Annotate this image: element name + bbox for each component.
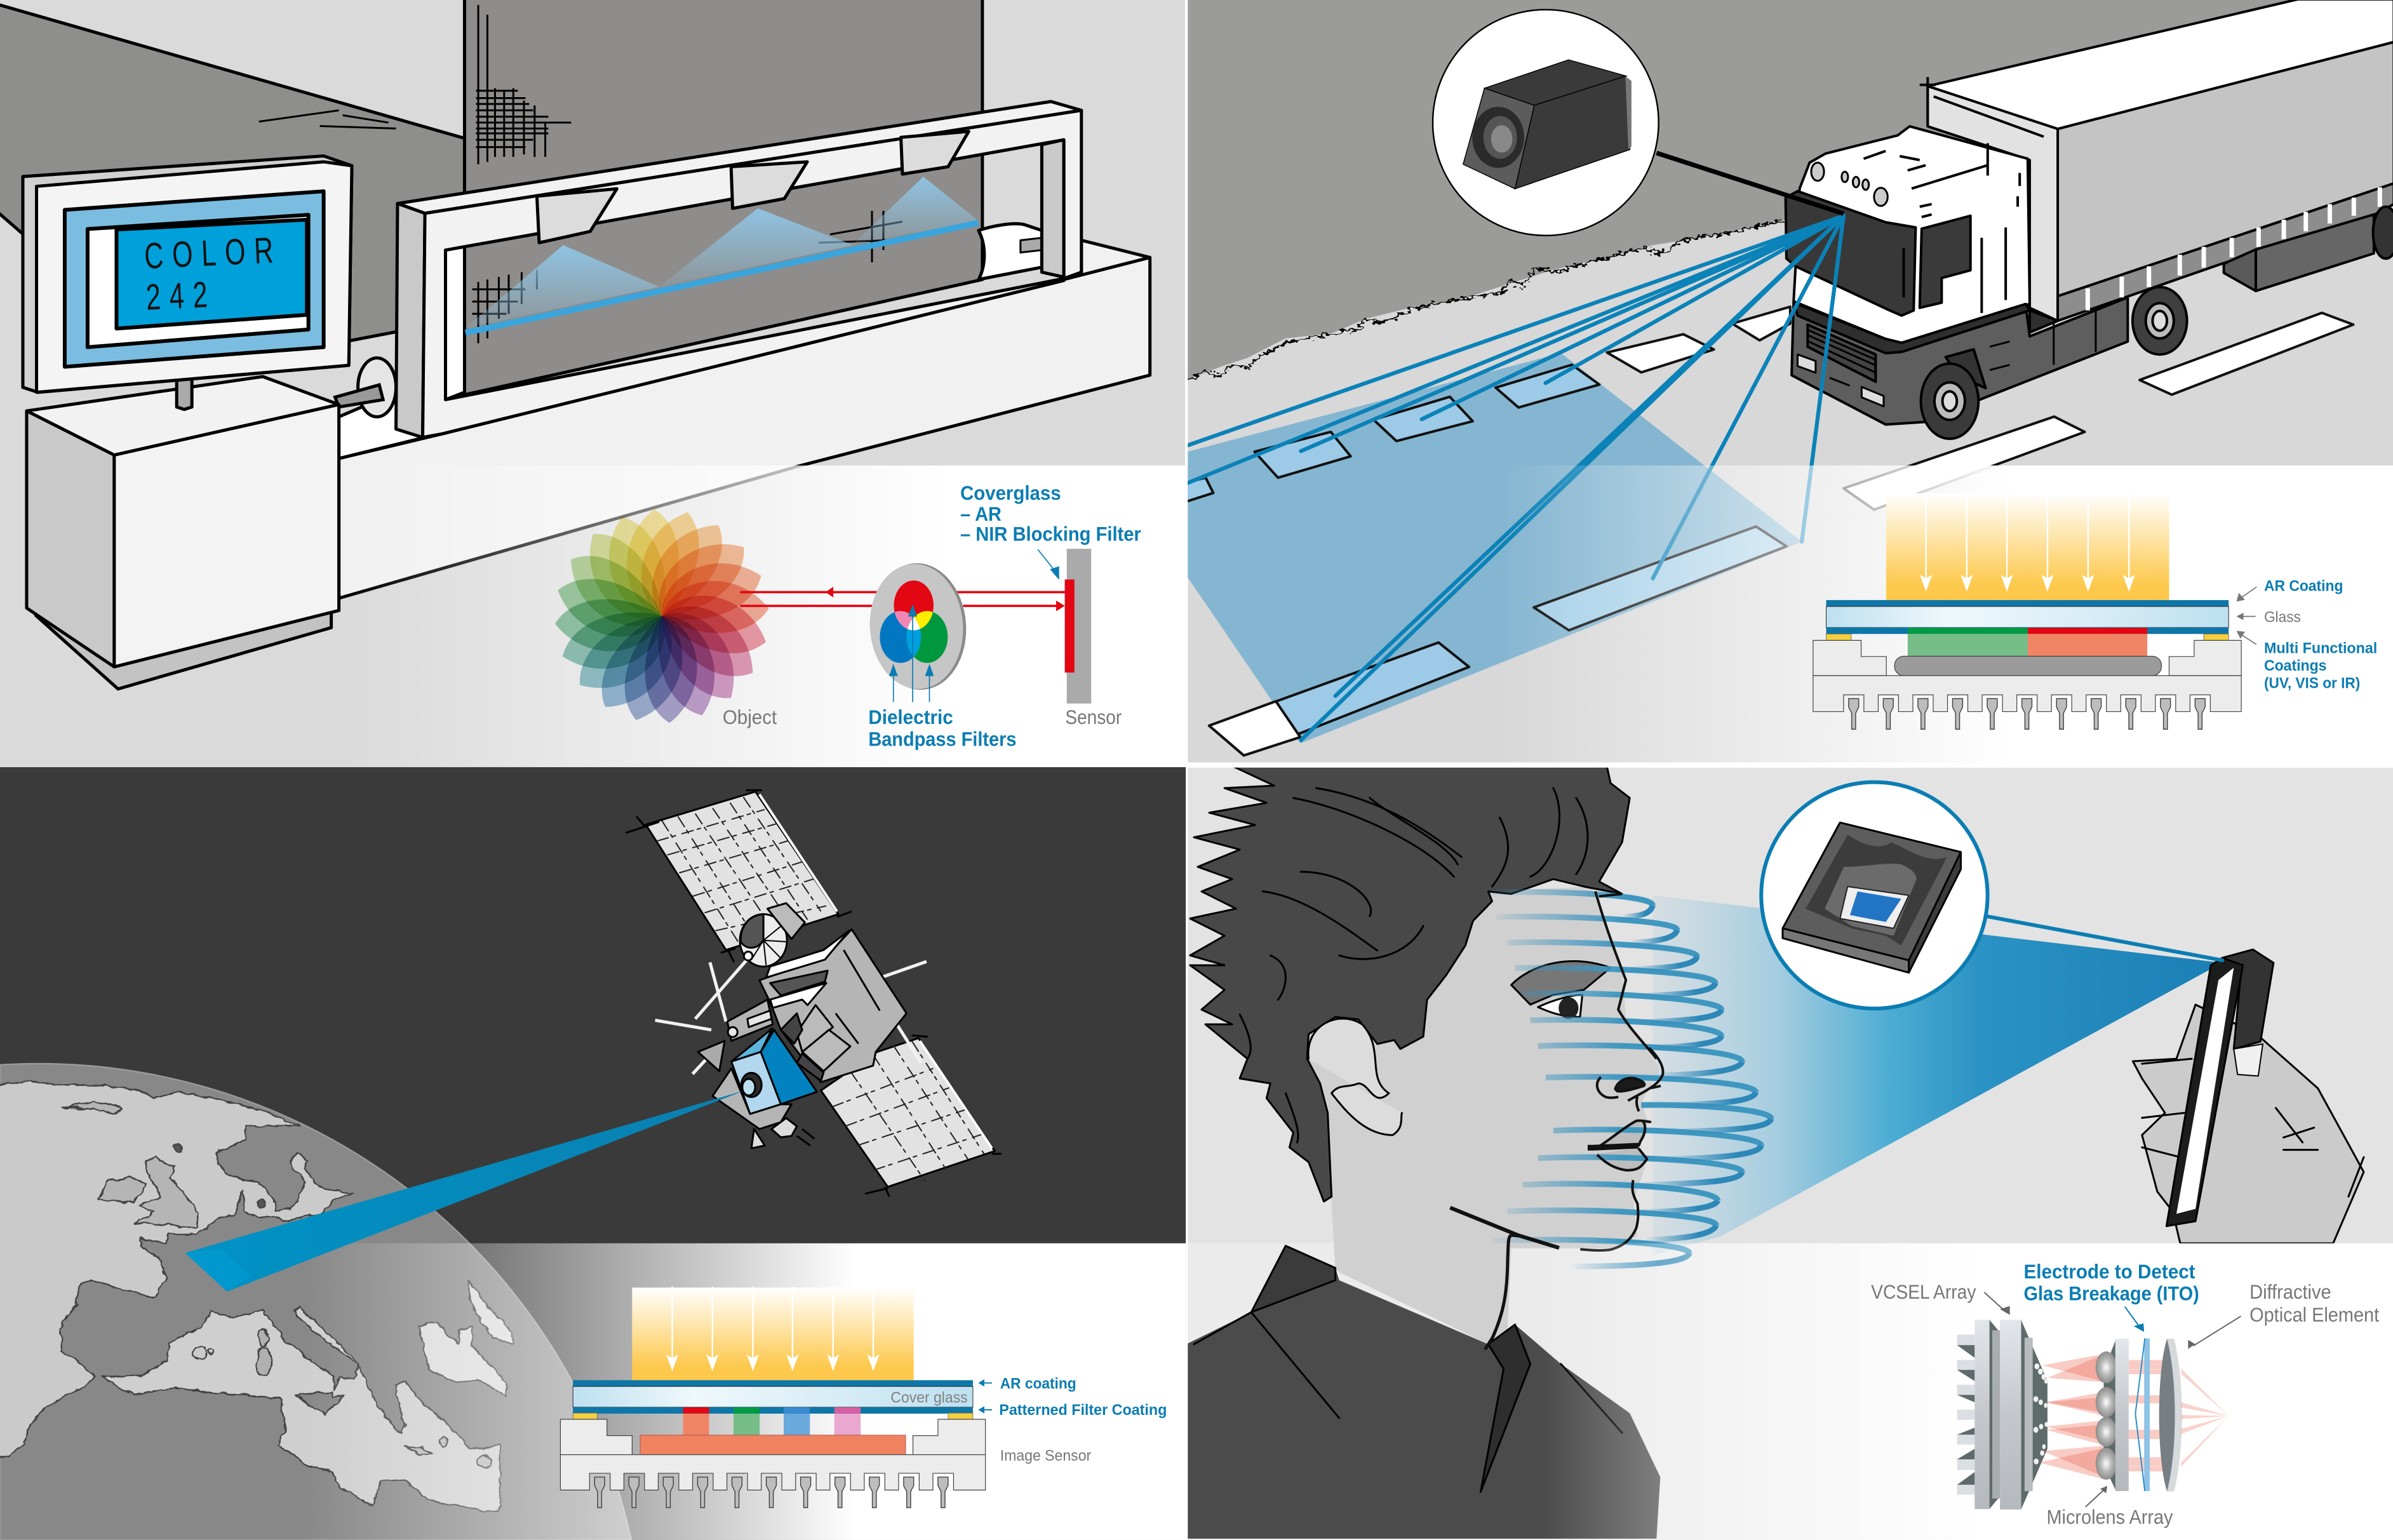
road lane markings [1175, 307, 2354, 756]
callout: camera close-up circle [1433, 10, 1659, 236]
label: patterned filter coating: Patterned Filter Coating [999, 1402, 1167, 1419]
label: multi functional coatings [2264, 639, 2377, 692]
panel: 3D face recognition on smartphone [1186, 766, 2393, 1540]
scan line [466, 223, 978, 333]
label: AR coating: AR coating [1000, 1376, 1076, 1393]
fade to white behind diagram [305, 1243, 1186, 1540]
monitor text: 242 [145, 274, 217, 318]
fade to white behind diagram [1503, 465, 2393, 763]
fade to white behind diagram [344, 465, 1186, 768]
leader arrows [2236, 587, 2256, 645]
label: diffractive optical element: Diffractive [2249, 1281, 2331, 1303]
sensor with coverglass [1065, 549, 1091, 704]
light beam from phone [1652, 895, 2222, 1255]
label: microlens array: Microlens Array [2047, 1506, 2173, 1529]
panel: colour measurement on a production line [0, 0, 1186, 768]
filter pointer arrows [889, 549, 1059, 702]
label: diffractive optical element [2249, 1281, 2379, 1326]
red light rays [740, 587, 1065, 611]
illustration: roadside and grass line [1186, 0, 2393, 380]
illustration: earth globe [0, 1064, 631, 1540]
panel: lane detection camera on truck [1175, 0, 2393, 763]
shirt [1186, 1246, 1660, 1539]
hair [1190, 766, 1630, 1202]
hair strands [1240, 788, 1588, 1142]
label: multi functional coatings: Coatings [2264, 657, 2326, 674]
light cones from the three cameras [466, 177, 978, 328]
label: dielectric bandpass filters: Bandpass Filters [868, 728, 1016, 750]
label: diffractive optical element: Optical Element [2249, 1304, 2379, 1326]
label: coverglass: – NIR Blocking Filter [960, 523, 1141, 546]
monitor text [145, 238, 273, 310]
label: coverglass [960, 482, 1141, 546]
collar and shirt folds [1194, 1246, 1622, 1492]
dielectric bandpass filter disc [866, 560, 970, 693]
chip package diagram with coatings [1813, 493, 2241, 729]
upper face profile line [1595, 892, 1656, 1059]
label: VCSEL array: VCSEL Array [1871, 1281, 1976, 1303]
illustration: truck and trailer [1786, 0, 2393, 439]
blue scanning coils [1488, 892, 1771, 1266]
illustration: printing machine frame with cameras [0, 0, 1150, 598]
camera sensor rays [1178, 216, 1844, 740]
label: electrode to detect glass breakage: Glas Breakage (ITO) [2023, 1283, 2199, 1305]
lips fill [1597, 1121, 1650, 1170]
leader arrows [1984, 1292, 2241, 1507]
label: image sensor: Image Sensor [1000, 1447, 1091, 1464]
label: AR coating: AR Coating [2264, 578, 2343, 595]
illustration: satellite [626, 790, 1002, 1196]
illustration: control cabinet [27, 377, 339, 689]
label: glass: Glass [2264, 609, 2301, 626]
label: sensor: Sensor [1065, 706, 1122, 728]
pointer arrows [978, 1379, 992, 1414]
map of Europe [0, 1081, 513, 1511]
label: electrode to detect glass breakage [2023, 1261, 2199, 1305]
eye and brow [1512, 961, 1611, 1005]
camera connector line [1656, 153, 1844, 213]
label: multi functional coatings: Multi Functional [2264, 639, 2377, 657]
face profile, nose, mouth and jaw lines [1450, 1048, 1663, 1349]
illustration: monitor [23, 156, 352, 410]
ear [1308, 1019, 1402, 1135]
face and neck [1301, 887, 1660, 1344]
projection area on the road [1188, 353, 1802, 743]
line from lens to phone [1985, 916, 2222, 960]
colour wheel: object [549, 504, 774, 728]
satellite beam to earth [185, 1091, 744, 1292]
illustration: drive shaft and disc [335, 358, 396, 417]
panel: earth observation satellite [0, 767, 1186, 1540]
illustration: person profile, beam, phone [1186, 766, 2222, 1539]
fade to white behind diagram [1541, 1243, 2393, 1540]
label: dielectric bandpass filters: Dielectric [868, 706, 953, 728]
label: multi functional coatings: (UV, VIS or IR) [2264, 675, 2360, 692]
label: cover glass: Cover glass [890, 1389, 968, 1406]
label: coverglass: – AR [960, 503, 1002, 525]
structured light projector diagram [1957, 1292, 2241, 1510]
label: object: Object [723, 706, 777, 728]
callout: chip close-up circle [1761, 782, 1988, 1008]
label: electrode to detect glass breakage: Electrode to Detect [2023, 1261, 2195, 1283]
monitor text: COLOR [144, 229, 283, 277]
package diagram with patterned filters [560, 1287, 986, 1508]
illustration: phone and hand [1761, 782, 2364, 1243]
label: coverglass: Coverglass [960, 482, 1061, 504]
label: dielectric bandpass filters [868, 706, 1016, 750]
